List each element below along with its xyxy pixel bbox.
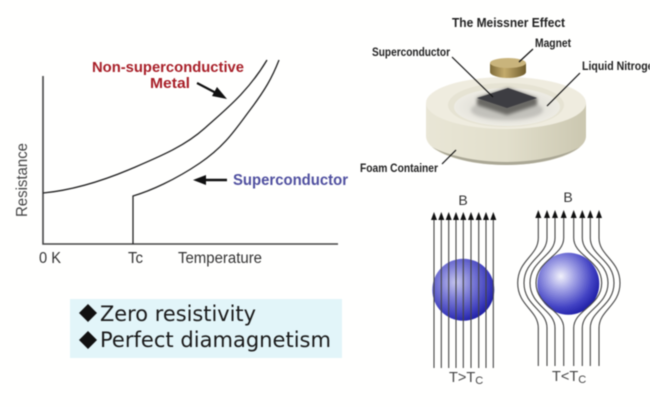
panel: Meissner effect apparatus	[360, 16, 650, 175]
label: T below Tc: T<T	[552, 369, 578, 385]
axis label: 0 K: 0 K	[39, 250, 62, 267]
label: non-superconductive metal	[92, 59, 244, 92]
field lines	[518, 218, 620, 366]
label: superconductor: Superconductor	[372, 47, 450, 59]
label: non-superconductive metal: Non-superconductive	[92, 59, 244, 76]
field lines	[434, 218, 493, 368]
title: The Meissner Effect	[452, 16, 566, 30]
text: perfect diamagnetism: Perfect diamagnetism	[100, 328, 331, 352]
icon: diamond bullet	[79, 304, 97, 322]
label: B: B	[563, 189, 573, 205]
axes	[43, 76, 338, 244]
curve: non-superconductive metal	[43, 60, 267, 193]
label: superconductor: Superconductor	[233, 172, 348, 189]
curve: superconductor	[133, 60, 279, 244]
label: T above Tc: C	[475, 375, 483, 387]
axis label: resistance: Resistance	[14, 143, 31, 217]
label: B: B	[458, 192, 468, 208]
magnet	[490, 58, 526, 78]
blue sphere	[432, 259, 494, 321]
blue sphere	[537, 253, 599, 315]
superconductor block	[471, 88, 543, 120]
label: T below Tc: C	[578, 374, 586, 386]
icon: diamond bullet	[79, 331, 97, 349]
diagram: field penetrates sphere, T above Tc	[431, 192, 496, 387]
label: T above Tc: T>T	[449, 370, 475, 386]
label: foam container: Foam Container	[360, 163, 438, 175]
arrowheads	[431, 212, 496, 220]
panel: resistance vs temperature graph	[14, 59, 348, 267]
axis label: temperature: Temperature	[178, 250, 262, 267]
axis label: Tc: Tc	[128, 250, 143, 267]
text: zero resistivity: Zero resistivity	[100, 302, 256, 326]
leader lines	[442, 49, 580, 164]
arrow: to metal curve	[197, 83, 227, 99]
label: non-superconductive metal: Metal	[150, 75, 190, 92]
diagram: field expelled from sphere, T below Tc	[518, 189, 620, 386]
label: magnet: Magnet	[535, 38, 571, 50]
arrowheads	[535, 210, 602, 218]
panel: key properties box	[70, 299, 342, 358]
foam container	[426, 77, 586, 165]
arrow: to superconductor curve	[193, 175, 227, 185]
